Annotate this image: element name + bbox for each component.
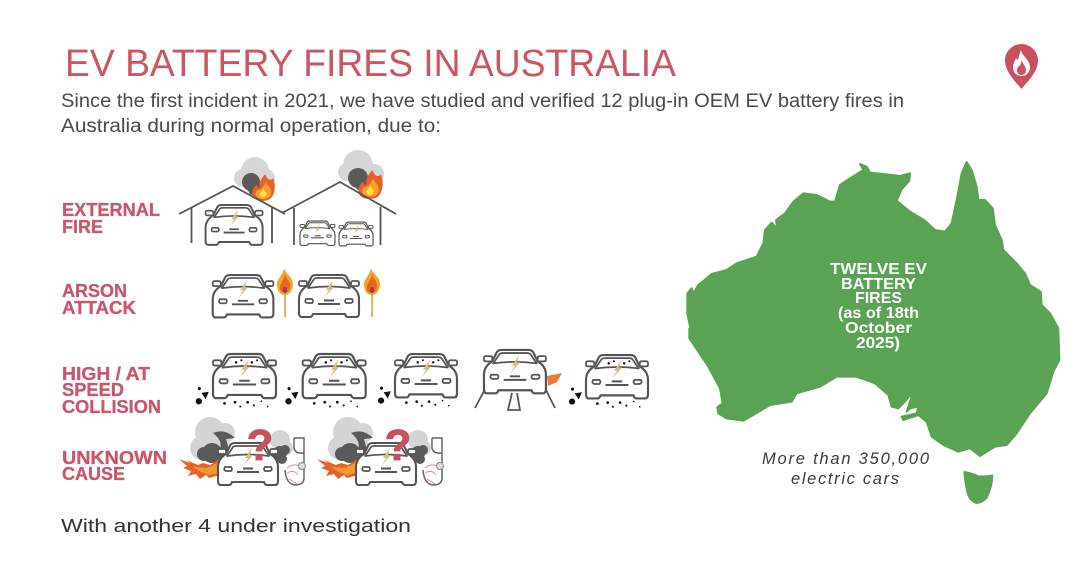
icon: car on road with flame [475, 350, 562, 410]
icons: unknown cause cars [179, 417, 444, 485]
electric cars note: electric cars [791, 470, 899, 488]
icon: burning car two [317, 417, 444, 485]
map caption: FIRES [855, 290, 902, 307]
icons: burning garages [179, 150, 396, 246]
title: EV BATTERY FIRES IN AUSTRALIA [65, 43, 677, 85]
row label: unknown cause: CAUSE [62, 464, 125, 484]
row label: external fire: FIRE [62, 217, 103, 237]
intro text: Australia during normal operation, due to: [61, 116, 441, 137]
icon: garage two smoke and fire [338, 150, 384, 199]
row label: high / at speed collision: SPEED [62, 380, 124, 400]
row label: high / at speed collision: COLLISION [62, 397, 161, 417]
row label: external fire: EXTERNAL [62, 200, 160, 220]
icons: collision cars [196, 350, 648, 410]
map caption [830, 261, 928, 352]
row label: external fire [62, 200, 160, 237]
row label: arson attack [62, 281, 136, 318]
footer note: With another 4 under investigation [61, 515, 411, 536]
row label: arson attack: ATTACK [62, 298, 136, 318]
icon: burning car one [179, 417, 306, 485]
mainland [687, 162, 1059, 456]
icon: garage two with two cars [282, 182, 396, 246]
icon: burning car one: ? [247, 421, 273, 470]
row label: high / at speed collision: HIGH / AT [62, 364, 150, 384]
map caption: TWELVE EV [830, 261, 928, 278]
intro text [61, 91, 904, 137]
icon: burning car two: ? [385, 421, 411, 470]
electric cars note [762, 450, 930, 488]
map caption: October [845, 320, 912, 337]
row label: unknown cause: UNKNOWN [62, 448, 167, 468]
map caption: 2025) [856, 335, 900, 352]
intro text: Since the first incident in 2021, we have studied and verified 12 plug-in OEM EV battery fires in [61, 91, 904, 112]
icon: garage one smoke and fire [234, 157, 275, 201]
icon: flame location pin [1005, 44, 1038, 89]
row label: unknown cause [62, 448, 167, 484]
electric cars note: More than 350,000 [762, 450, 930, 468]
Tasmania [964, 472, 993, 503]
icons: cars with matches [213, 268, 380, 317]
icon: garage one with car [179, 186, 285, 245]
map caption: BATTERY [841, 276, 917, 293]
row label: arson attack: ARSON [62, 281, 127, 301]
map: Australia [687, 162, 1059, 503]
map caption: (as of 18th [838, 305, 919, 322]
row label: high / at speed collision [62, 364, 161, 417]
